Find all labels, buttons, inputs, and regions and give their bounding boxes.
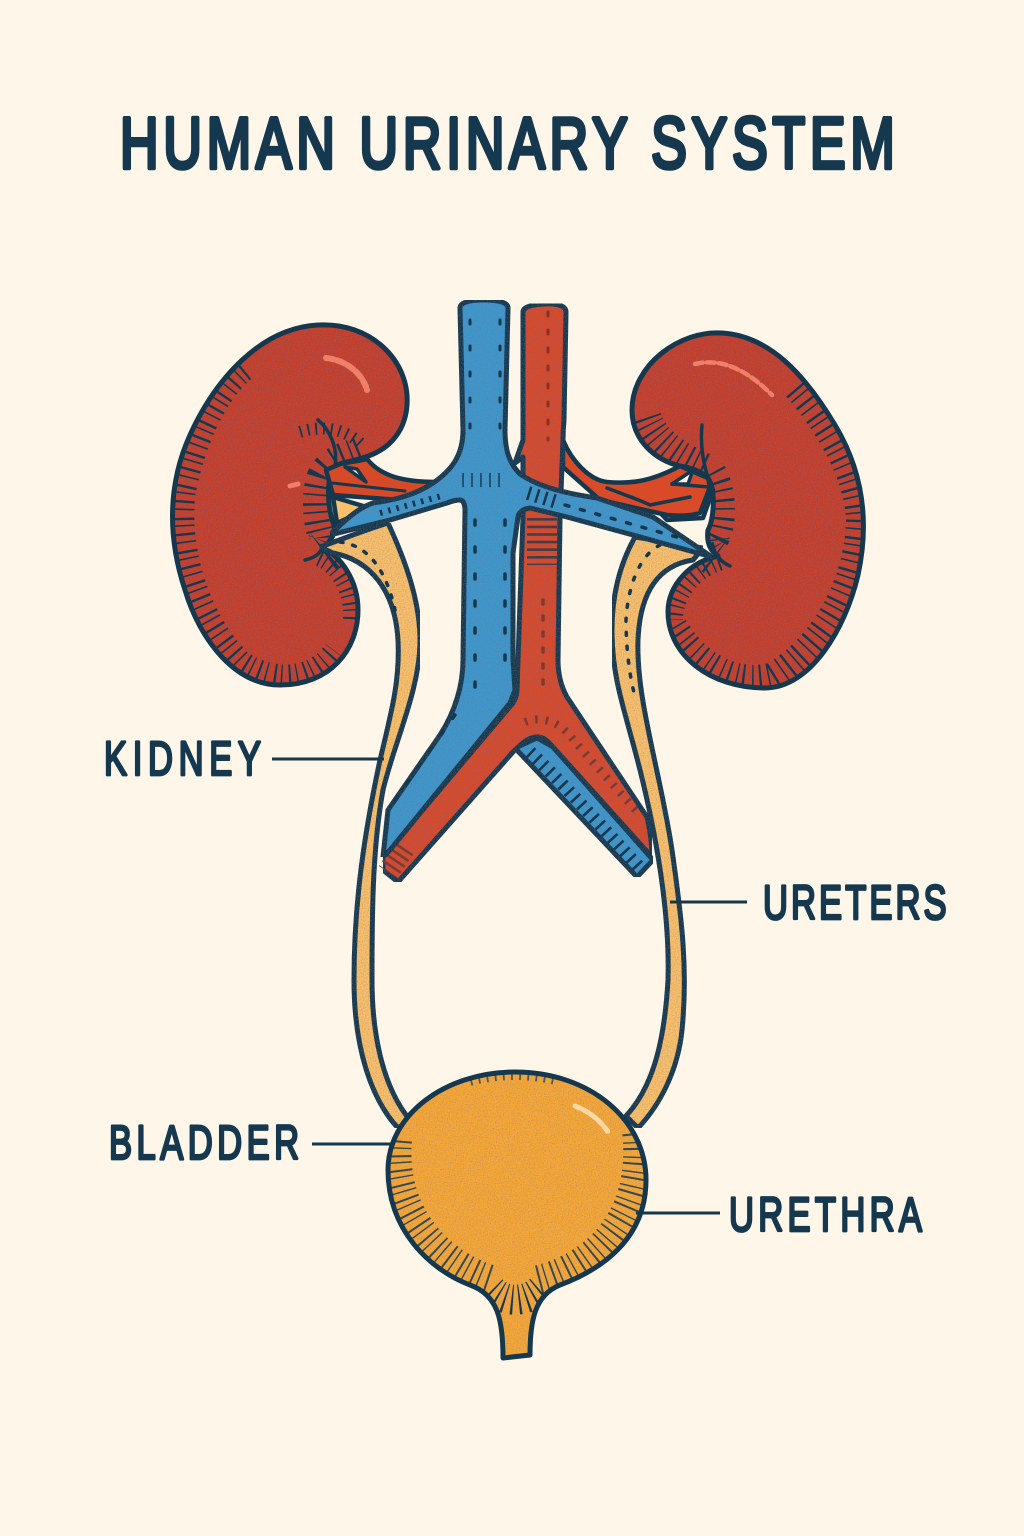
right kidney	[632, 333, 864, 688]
label: ureters: URETERS	[763, 875, 947, 929]
label: kidney: KIDNEY	[104, 731, 261, 785]
right renal artery	[563, 440, 710, 516]
title: HUMAN URINARY SYSTEM	[120, 104, 895, 184]
left kidney	[172, 325, 407, 685]
vena cava	[330, 300, 712, 857]
left ureter	[320, 497, 420, 1128]
bladder	[388, 1072, 646, 1358]
diagram: urinary system	[172, 300, 864, 1358]
label: urethra: URETHRA	[729, 1187, 922, 1241]
aorta	[383, 304, 652, 882]
lower blue vein branch	[515, 738, 653, 877]
left renal artery	[326, 459, 437, 500]
label: bladder: BLADDER	[109, 1115, 299, 1169]
right ureter	[612, 490, 713, 1128]
